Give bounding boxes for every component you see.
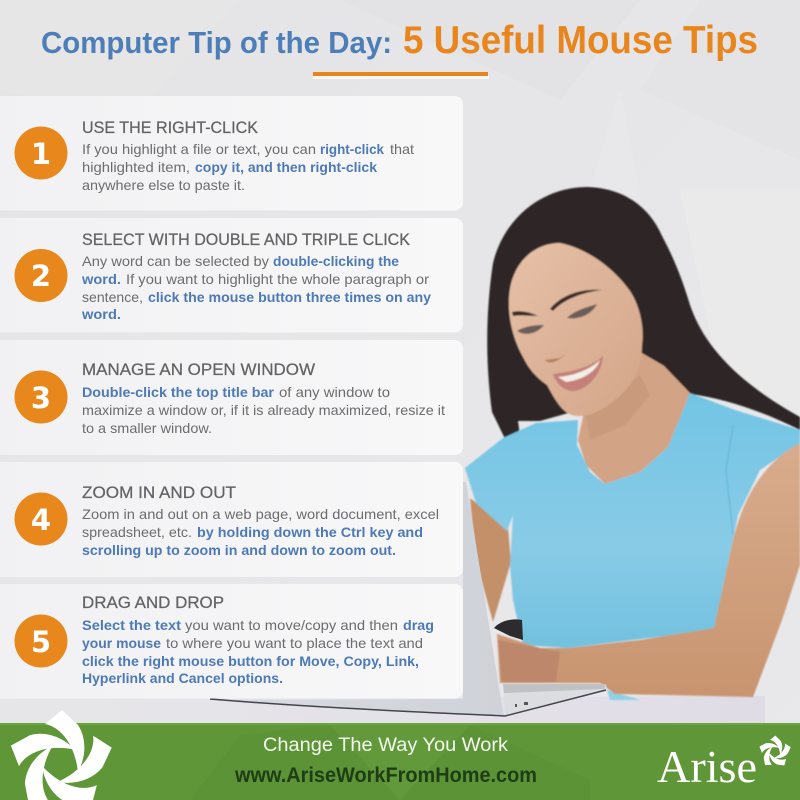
- icon: number 1: [14, 126, 68, 180]
- icon: number 4: [14, 492, 68, 546]
- text: tip 1 body: highlighted item,: [82, 159, 190, 175]
- logo: small pinwheel: [758, 736, 793, 770]
- icon: number 3: 3: [31, 381, 51, 415]
- icon: number 3: [14, 370, 68, 424]
- text: tip 4 body: scrolling up to zoom in and down to zoom out.: [82, 542, 396, 558]
- panel: tip 4: [0, 462, 463, 577]
- text: tip 5 body: click the right mouse button for Move, Copy, Link,: [82, 653, 419, 669]
- text: tip 5 body: you want to move/copy and then: [185, 617, 398, 633]
- title: orange part: 5 Useful Mouse Tips: [403, 19, 758, 62]
- text: tip 5 body: Select the text: [82, 617, 181, 633]
- neck: [578, 352, 690, 484]
- sleeve seam: [726, 425, 733, 535]
- shirt: [465, 393, 800, 648]
- left arm: [470, 498, 511, 622]
- text: tip 2 body: Any word can be selected by: [82, 253, 269, 269]
- footer band: [0, 723, 800, 800]
- table surface: [0, 696, 765, 723]
- text: tip 1 body: that: [390, 141, 414, 157]
- heading: tip 3: MANAGE AN OPEN WINDOW: [82, 360, 315, 379]
- neck shadow: [586, 375, 650, 440]
- panel: tip 3: [0, 340, 463, 455]
- text: tip 2 body: word.: [81, 306, 121, 322]
- laptop: [210, 482, 607, 716]
- icon: number 2: 2: [31, 259, 51, 293]
- logo: Arise wordmark: Arise: [657, 742, 757, 792]
- panel: tip 2: [0, 218, 463, 332]
- icon: number 4: 4: [31, 503, 51, 537]
- text: tip 2 body: word.: [81, 271, 121, 287]
- text: tip 1 body: anywhere else to paste it.: [82, 177, 245, 193]
- hair: [487, 187, 800, 492]
- face: [509, 243, 643, 416]
- text: tip 2 body: sentence,: [82, 289, 143, 305]
- heading: tip 2: SELECT WITH DOUBLE AND TRIPLE CLICK: [82, 230, 411, 249]
- text: tip 5 body: [82, 617, 434, 686]
- text: tip 2 body: double-clicking the: [273, 253, 399, 269]
- text: tip 3 body: of any window to: [279, 384, 390, 400]
- teeth: [558, 360, 600, 382]
- heading: tip 5: DRAG AND DROP: [82, 593, 224, 612]
- nose shadow: [545, 354, 566, 362]
- text: tip 2 body: [81, 253, 431, 322]
- text: tip 4 body: spreadsheet, etc.: [82, 524, 192, 540]
- footer website: www.AriseWorkFromHome.com: [234, 764, 537, 787]
- title: blue part: Computer Tip of the Day:: [41, 25, 392, 60]
- text: tip 5 body: to where you want to place the text and: [166, 635, 423, 651]
- text: tip 1 body: [82, 141, 414, 193]
- panel: tip 5: [0, 584, 463, 698]
- right arm: [497, 443, 800, 697]
- text: tip 5 body: Hyperlink and Cancel options.: [82, 670, 283, 686]
- text: tip 4 body: Zoom in and out on a web page, word document, excel: [82, 506, 439, 522]
- text: tip 2 body: click the mouse button three times on any: [148, 289, 431, 305]
- text: tip 3 body: [82, 384, 445, 436]
- heading: tip 4: ZOOM IN AND OUT: [82, 483, 236, 502]
- heading: tip 1: USE THE RIGHT-CLICK: [82, 118, 259, 137]
- text: tip 3 body: to a smaller window.: [82, 420, 212, 436]
- icon: number 5: 5: [31, 625, 51, 659]
- text: tip 4 body: by holding down the Ctrl key and: [197, 524, 423, 540]
- text: tip 5 body: your mouse: [82, 635, 161, 651]
- blue strip under arm: [607, 690, 640, 700]
- text: tip 1 body: right-click: [320, 141, 384, 157]
- text: tip 1 body: If you highlight a file or text, you can: [82, 141, 316, 157]
- title underline: [313, 72, 489, 79]
- hand shading: [498, 640, 560, 682]
- mouth: [553, 356, 603, 391]
- text: tip 5 body: drag: [403, 617, 434, 633]
- icon: number 5: [14, 614, 68, 668]
- icon: number 1: 1: [31, 137, 51, 171]
- cord: [494, 619, 523, 640]
- logo: large pinwheel: [6, 710, 119, 800]
- text: tip 4 body: [82, 506, 439, 558]
- footer tagline: Change The Way You Work: [263, 735, 509, 756]
- text: tip 2 body: If you want to highlight the whole paragraph or: [126, 271, 429, 287]
- icon: number 2: [14, 249, 68, 302]
- title: [41, 19, 758, 62]
- text: tip 3 body: maximize a window or, if it is already maximized, resize it: [82, 402, 445, 418]
- panel: tip 1: [0, 96, 463, 210]
- eyebrows: [512, 290, 602, 316]
- eyes: [517, 304, 597, 334]
- photo: woman using a laptop: [465, 187, 800, 700]
- text: tip 1 body: copy it, and then right-click: [195, 159, 377, 175]
- text: tip 3 body: Double-click the top title bar: [82, 384, 275, 400]
